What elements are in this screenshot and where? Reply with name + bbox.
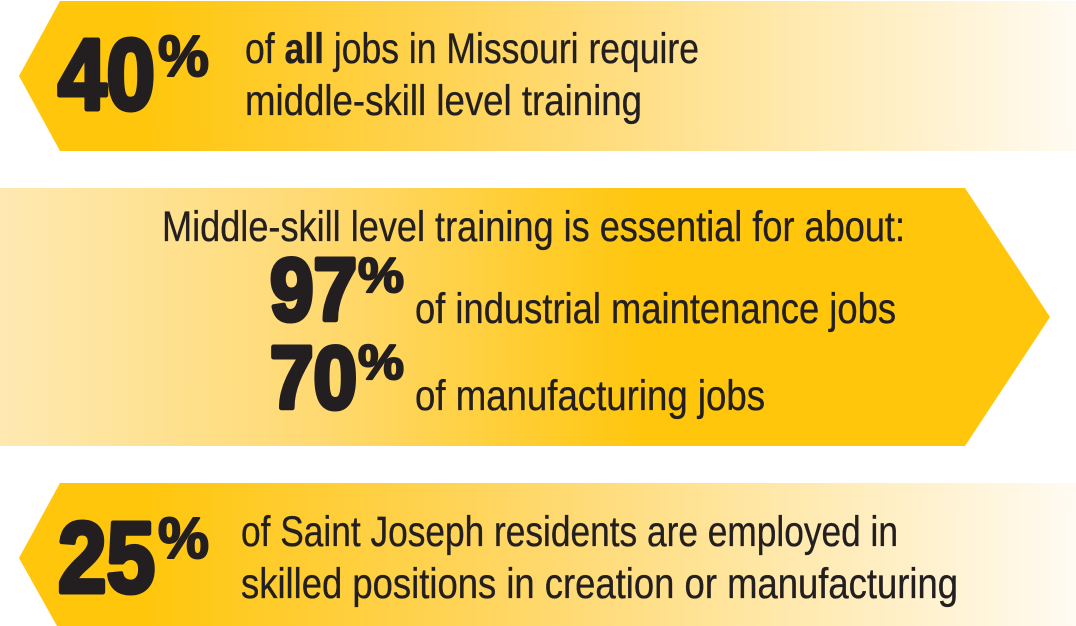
statistic: 97 percent: % bbox=[358, 249, 404, 303]
text: industrial maintenance: of industrial maintenance jobs bbox=[415, 285, 896, 333]
text: Missouri jobs: middle-skill level training bbox=[245, 77, 642, 125]
statistic: 40 percent: 40 bbox=[58, 19, 155, 131]
text: Missouri jobs: of all jobs in Missouri require bbox=[245, 25, 699, 73]
statistic: 25 percent: % bbox=[158, 506, 209, 571]
panel: 25% of residents bbox=[19, 483, 1076, 626]
statistic: 70 percent: % bbox=[358, 336, 404, 390]
statistic: 25 percent: 25 bbox=[58, 502, 155, 614]
text: Saint Joseph residents: of Saint Joseph residents are employed in bbox=[241, 508, 898, 556]
panel: essential training bbox=[0, 188, 1050, 446]
statistic: 70 percent: 70 bbox=[270, 328, 357, 427]
text: manufacturing: of manufacturing jobs bbox=[415, 372, 765, 420]
banner arrow: top bbox=[19, 1, 1076, 151]
text: Saint Joseph residents bbox=[241, 508, 958, 608]
heading: essential for about: Middle-skill level training is essential for about: bbox=[162, 203, 905, 251]
text: Missouri jobs bbox=[245, 25, 699, 125]
banner arrow: middle bbox=[0, 188, 1050, 446]
panel: 40% of jobs bbox=[19, 1, 1076, 151]
statistic: 97 percent: 97 bbox=[270, 240, 357, 339]
text: Saint Joseph residents: skilled positions in creation or manufacturing bbox=[241, 560, 958, 608]
statistic: 40 percent: % bbox=[158, 24, 209, 89]
banner arrow: bottom bbox=[19, 483, 1076, 626]
